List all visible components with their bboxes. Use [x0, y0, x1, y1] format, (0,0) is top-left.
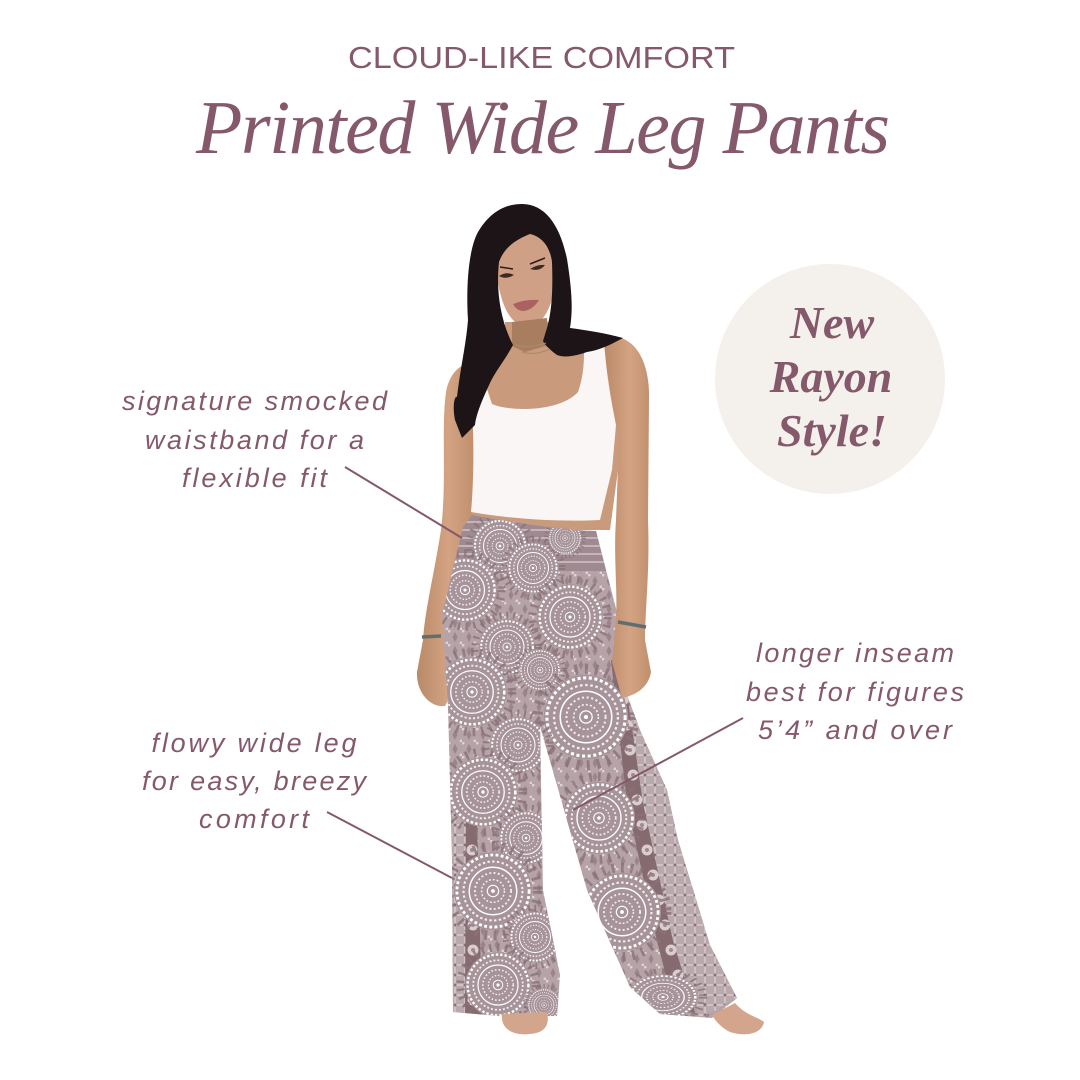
model figure [417, 204, 764, 1034]
mandalas [469, 515, 531, 577]
feet [502, 1012, 548, 1034]
callout: wide leg: flowy wide leg [152, 728, 356, 758]
necklaces [515, 343, 550, 353]
bracelets [422, 622, 646, 637]
leader line: inseam [573, 718, 743, 810]
badge: new rayon style: Rayon [769, 351, 892, 402]
left arm [417, 362, 474, 706]
side lace panels [628, 696, 737, 1018]
waistband smocking [450, 515, 610, 571]
right arm [604, 336, 651, 698]
callout: waistband: signature smocked [122, 386, 388, 416]
leader line: waistband [345, 467, 462, 538]
eyebrow heading: CLOUD-LIKE COMFORT [348, 40, 735, 75]
pants [442, 515, 737, 1018]
callout: wide leg: for easy, breezy [142, 766, 368, 796]
white crop top [471, 338, 616, 521]
callout: inseam: best for figures [746, 677, 964, 707]
stripe flowers [466, 844, 478, 856]
badge: new rayon style: Style! [777, 405, 887, 456]
callout: waistband: waistband for a [145, 425, 364, 455]
callout: waistband [122, 386, 388, 493]
side stripes [465, 822, 482, 1014]
badge: new rayon style: New [789, 297, 874, 348]
callout: inseam: 5’4” and over [758, 715, 953, 745]
title: Printed Wide Leg Pants [195, 86, 890, 170]
badge: new rayon style [715, 264, 945, 494]
callout: inseam [746, 638, 964, 745]
callout: inseam: longer inseam [756, 638, 954, 668]
callout: waistband: flexible fit [182, 463, 328, 493]
hair [454, 204, 623, 438]
face and neck [495, 230, 553, 328]
facial features [499, 265, 545, 278]
callout: wide leg: comfort [199, 804, 310, 834]
torso skin [462, 322, 622, 530]
callout: wide leg [142, 728, 368, 834]
leader line: wide leg [327, 812, 452, 878]
